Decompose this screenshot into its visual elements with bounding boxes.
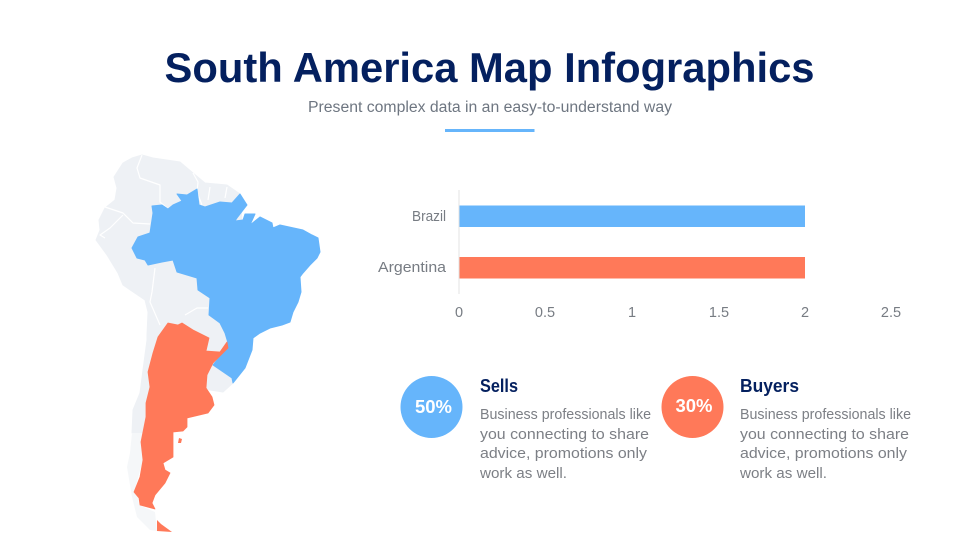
category labels: Argentina <box>378 260 447 276</box>
value axis labels: 0 <box>455 305 463 321</box>
chart axis line <box>458 190 460 294</box>
body text: Buyers: advice, promotions only <box>740 446 908 462</box>
value: 50%: 50% <box>415 397 452 417</box>
bar: Brazil <box>460 206 805 227</box>
map: South America <box>96 155 320 532</box>
body text: Buyers: you connecting to share <box>740 427 909 443</box>
bar: Argentina <box>460 257 805 278</box>
map: country borders <box>100 155 227 325</box>
body text: Buyers <box>739 407 911 482</box>
panel: Buyers <box>662 376 911 482</box>
map: Brazil <box>132 189 320 383</box>
map: other countries land <box>96 155 250 433</box>
category labels: Brazil <box>412 209 446 225</box>
circle: 50% <box>400 376 462 438</box>
body text: Sells: Business professionals like <box>480 407 651 423</box>
circle: 30% <box>662 376 724 438</box>
map: Valdes peninsula <box>178 438 182 443</box>
panel: Sells <box>400 376 651 482</box>
title: South America Map Infographics <box>164 44 814 91</box>
bar chart <box>378 190 901 321</box>
body text: Sells <box>479 407 651 482</box>
title underline <box>445 129 534 132</box>
heading: Buyers: Buyers <box>740 376 799 396</box>
category labels <box>378 209 447 276</box>
value axis labels: 0.5 <box>535 305 555 321</box>
value axis labels: 2 <box>801 305 809 321</box>
body text: Buyers: work as well. <box>739 466 827 482</box>
body text: Sells: work as well. <box>479 466 567 482</box>
body text: Sells: advice, promotions only <box>480 446 648 462</box>
value axis labels: 1.5 <box>709 305 729 321</box>
subtitle: Present complex data in an easy-to-understand way <box>308 99 672 116</box>
map: Patagonian Chile fragments <box>127 433 157 531</box>
value axis labels: 2.5 <box>881 305 901 321</box>
heading: Sells: Sells <box>480 376 518 396</box>
value axis labels <box>455 305 901 321</box>
map: Tierra del Fuego <box>157 520 172 532</box>
body text: Buyers: Business professionals like <box>740 407 911 423</box>
body text: Sells: you connecting to share <box>480 427 649 443</box>
value axis labels: 1 <box>628 305 636 321</box>
value: 30%: 30% <box>676 396 712 416</box>
map: Argentina <box>134 323 228 509</box>
